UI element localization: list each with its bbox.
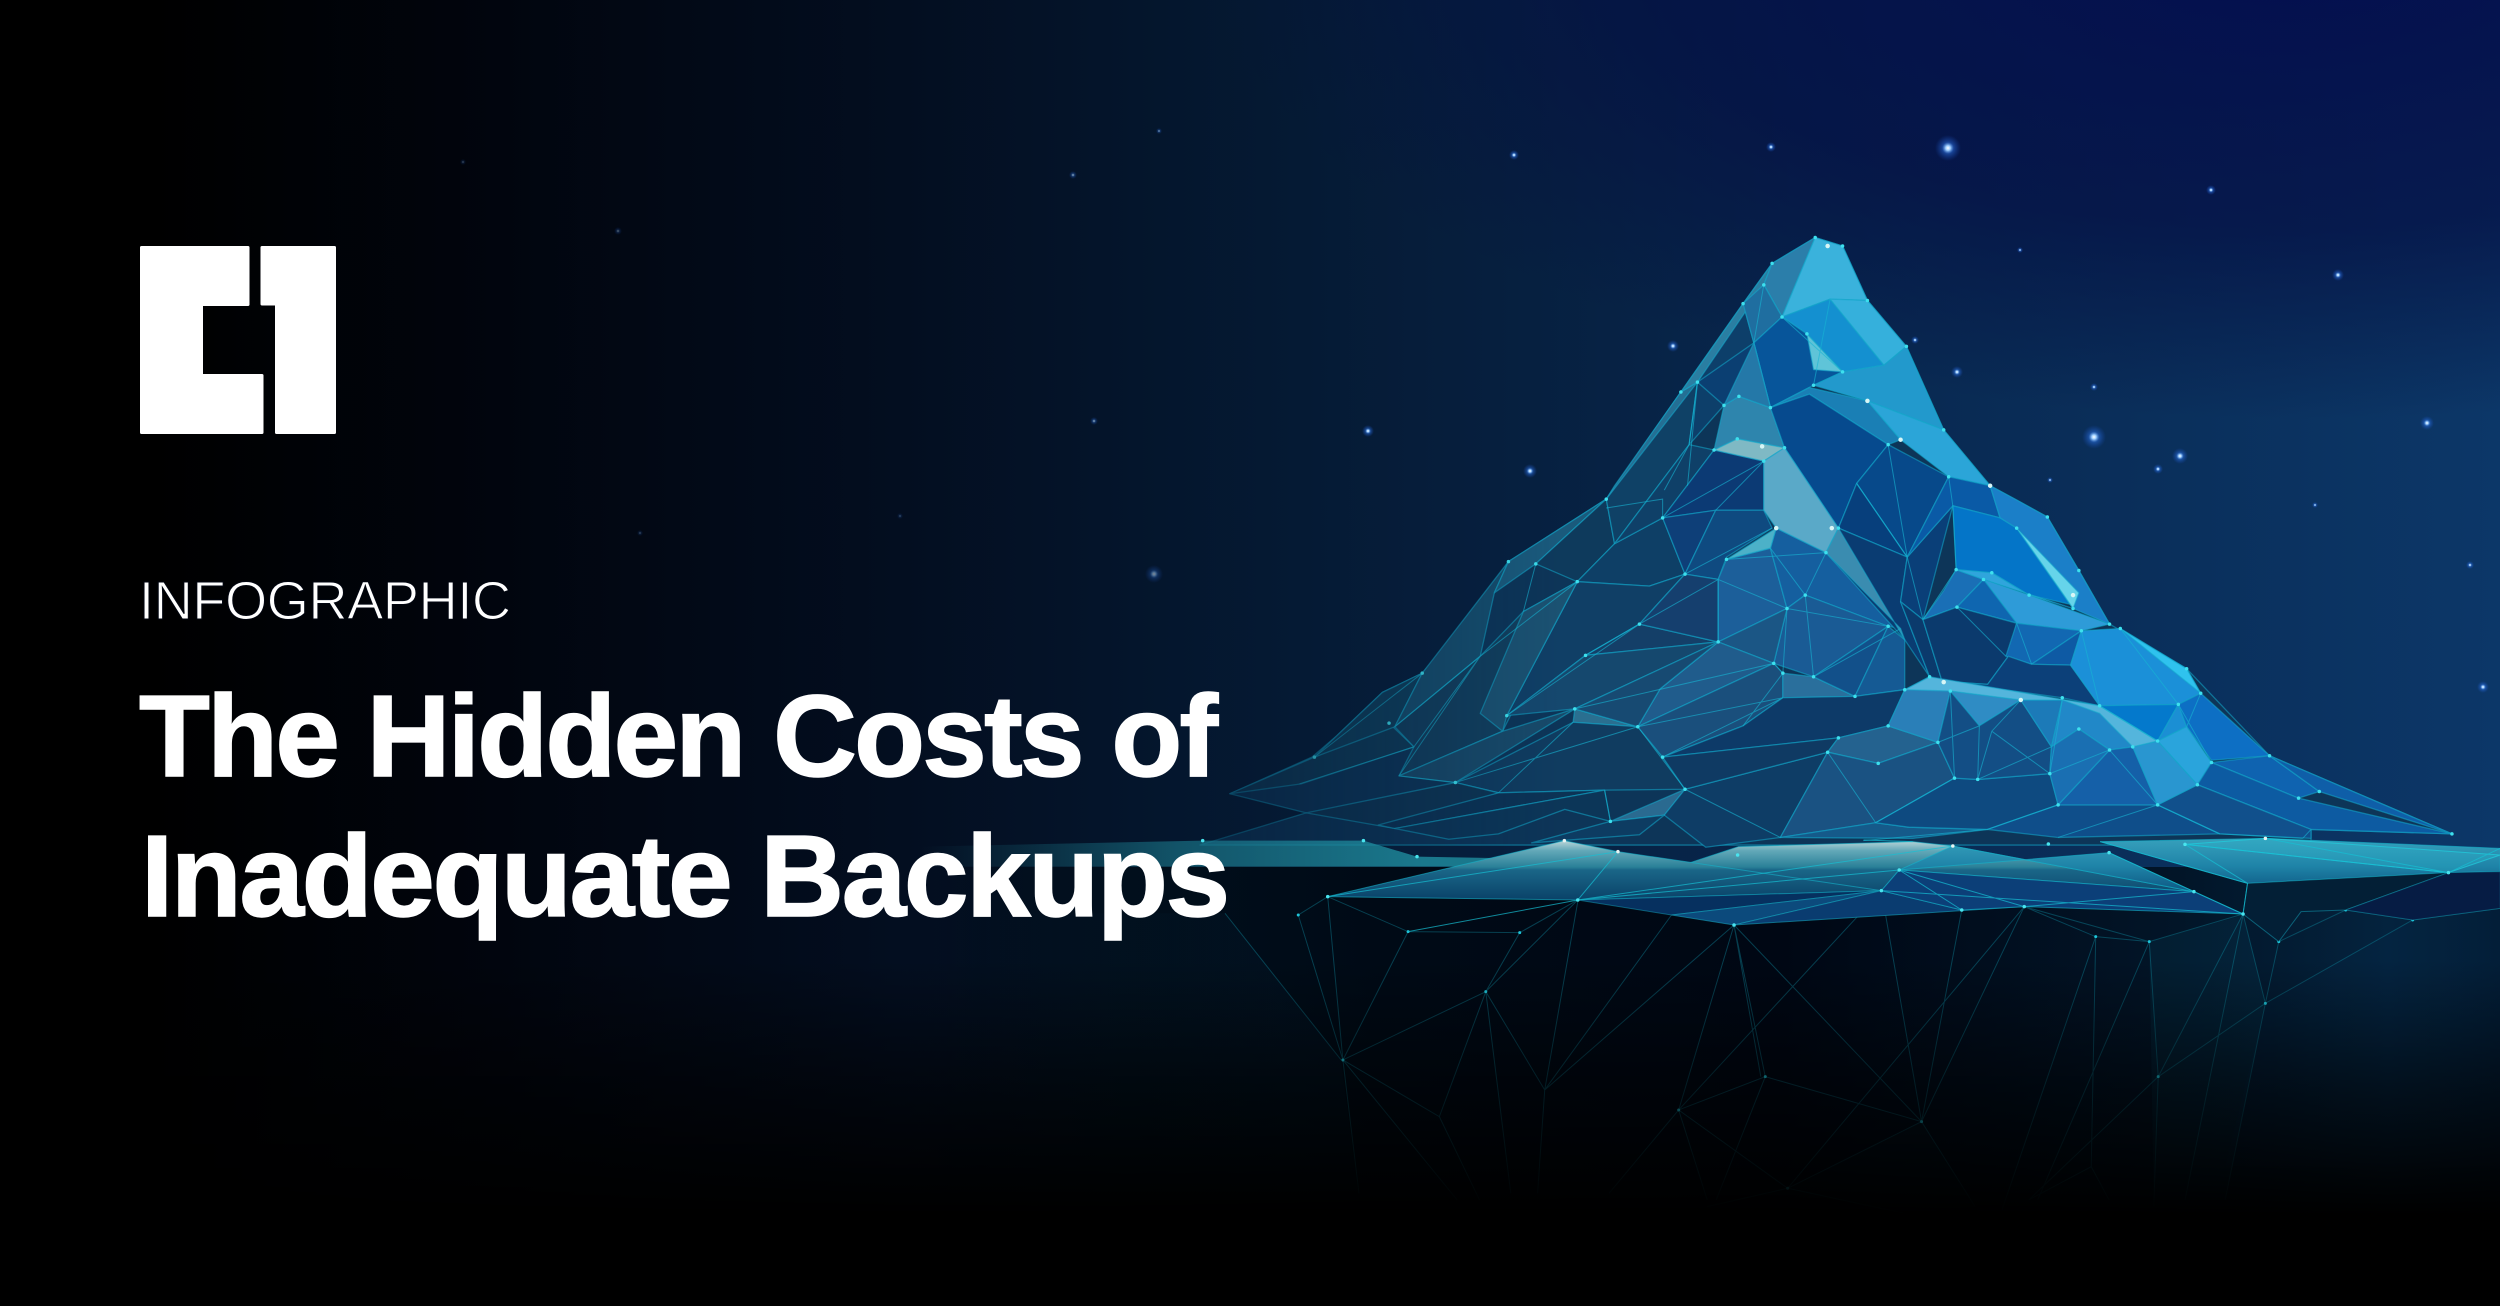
title: The Hidden Costs of — [139, 671, 1219, 801]
right dark faces — [1770, 394, 2452, 838]
bright ridges and lower right faces — [1714, 439, 2197, 805]
left flank facets — [1230, 263, 1828, 847]
title: Inadequate Backups — [141, 811, 1228, 941]
title — [139, 671, 1228, 941]
bottom fade to black — [0, 960, 2500, 1306]
extra thin mesh lines — [1299, 285, 2311, 841]
icon: logo — [142, 248, 334, 432]
mountain silhouette base — [1200, 237, 2452, 845]
stars — [460, 128, 2489, 693]
underwater area — [900, 867, 2500, 1306]
upper peak — [1697, 237, 1990, 486]
iceberg underwater mesh — [993, 873, 2500, 1213]
central faces — [1575, 450, 2220, 838]
ice shelf at the waterline — [921, 838, 2500, 942]
eyebrow: INFOGRAPHIC: INFOGRAPHIC — [139, 571, 511, 631]
mesh vertices — [1314, 237, 2452, 834]
iceberg above water: low-poly mountain — [1200, 237, 2452, 847]
